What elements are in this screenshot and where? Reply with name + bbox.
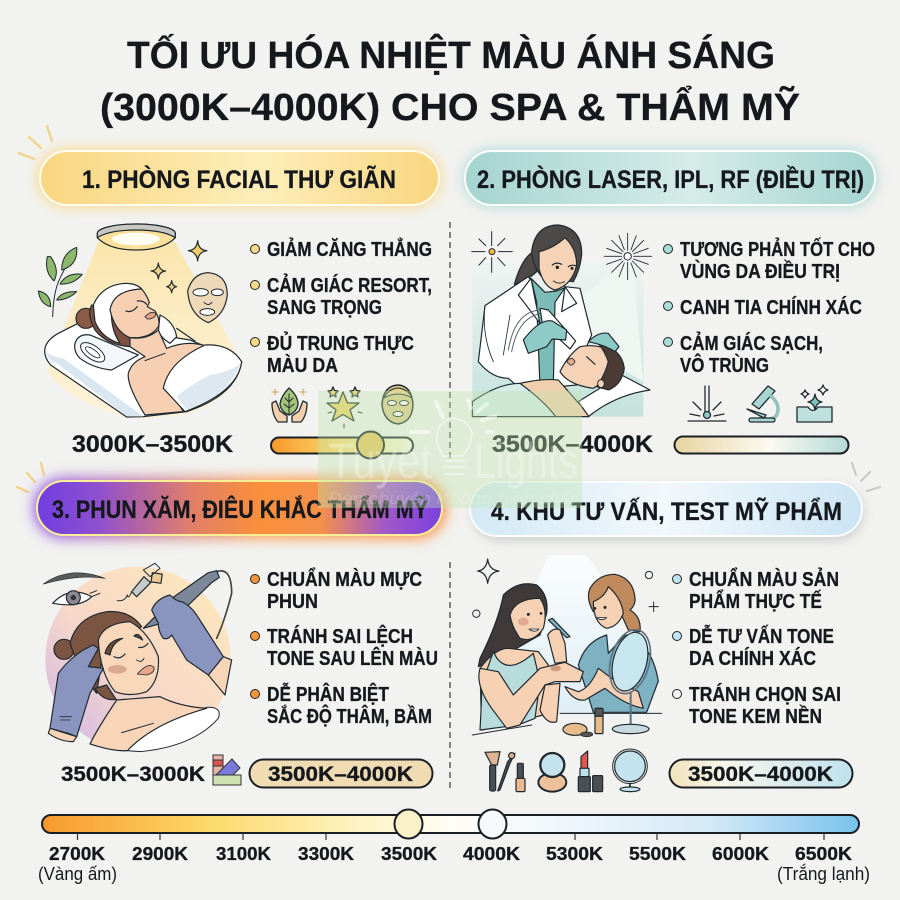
bullet list: CẢM GIÁC SẠCH, [680, 332, 823, 355]
scale labels: 2700K [49, 843, 106, 864]
slider: 3500K to 4000K [674, 436, 848, 454]
bullet list: SANG TRỌNG [267, 297, 382, 319]
icon: microscope [747, 386, 778, 422]
icon: laser beam [688, 386, 726, 421]
heading: facial room [19, 126, 440, 206]
watermark: Đèn chuyên Không gian chất [328, 489, 577, 508]
bullet list: SẮC ĐỘ THÂM, BẦM [267, 704, 432, 728]
scale labels: 6000K [712, 843, 770, 864]
icon: hands holding leaf [272, 388, 307, 422]
illustration: doctor treating patient [472, 225, 652, 417]
bullet list: CHUẨN MÀU SẢN [689, 568, 839, 591]
heading: laser room [464, 150, 876, 206]
icon: compact [538, 753, 566, 792]
bullet list [664, 237, 875, 377]
pill: 3500K to 4000K: 3500K–4000K [688, 763, 833, 786]
pill: 3500K to 4000K: 3500K–4000K [268, 763, 413, 786]
colour temperature scale [38, 810, 870, 884]
bullet list: VÙNG DA ĐIỀU TRỊ [680, 259, 840, 283]
scale labels: 2900K [132, 843, 189, 864]
range label: 3500K–3000K [61, 763, 205, 786]
icon: skin with sparkle [797, 385, 832, 422]
bullet list: PHUN [267, 591, 318, 613]
pill: 3500K to 4000K [250, 760, 432, 788]
marker: 3500K [394, 810, 422, 838]
panel: laser room [464, 150, 876, 458]
pill: 3500K to 4000K [670, 760, 852, 788]
range label: 3000K–3500K [72, 431, 234, 458]
cold label: (Trắng lạnh) [777, 863, 870, 884]
icon: stars [327, 387, 362, 428]
scale labels: 3500K [381, 843, 438, 864]
marker: 4000K [478, 810, 506, 838]
scale labels: 5300K [546, 843, 604, 864]
heading: consultation area [470, 463, 880, 541]
icon: colour swatches [213, 755, 241, 785]
illustration: eyebrow tattooing [43, 563, 232, 752]
scale labels [49, 843, 853, 864]
illustration: two women testing cosmetics [472, 555, 662, 792]
bullet list: GIẢM CĂNG THẲNG [267, 238, 432, 261]
bullet list: MÀU DA [267, 354, 338, 377]
bullet list: VÔ TRÙNG [680, 353, 769, 377]
warm label: (Vàng ấm) [38, 864, 117, 884]
bullet list [250, 238, 432, 377]
scale bar [42, 815, 859, 833]
bullet list: TONE SAU LÊN MÀU [267, 646, 438, 670]
slider: 3000K to 3500K [271, 432, 413, 458]
heading: tattoo room [17, 463, 446, 538]
heading: facial room: 1. PHÒNG FACIAL THƯ GIÃN [82, 164, 396, 194]
illustration: woman relaxing under warm lamp [38, 224, 243, 419]
bullet list: TRÁNH CHỌN SAI [689, 683, 841, 706]
title: TỐI ƯU HÓA NHIỆT MÀU ÁNH SÁNG [127, 32, 775, 77]
icon: lipstick [578, 751, 603, 792]
icon: brushes [485, 752, 525, 792]
bullet list [672, 568, 841, 728]
scale labels: 5500K [629, 843, 687, 864]
watermark [318, 391, 582, 508]
range label: 3500K–4000K [492, 431, 654, 458]
bullet list: CHUẨN MÀU MỰC [267, 568, 422, 591]
icon: face mask [382, 385, 413, 424]
bullet list: CẢM GIÁC RESORT, [267, 274, 432, 297]
title: (3000K–4000K) CHO SPA & THẨM MỸ [100, 84, 800, 129]
panel: tattoo room [17, 463, 446, 788]
bullet list: DỄ PHÂN BIỆT [267, 682, 389, 706]
scale labels: 3100K [216, 843, 272, 864]
watermark: Tuyet [328, 433, 432, 489]
bullet list: TRÁNH SAI LỆCH [267, 624, 413, 648]
bullet list: CANH TIA CHÍNH XÁC [680, 296, 862, 319]
bullet list: TONE KEM NỀN [689, 705, 822, 728]
icon: hand mirror [613, 749, 647, 792]
title [100, 32, 800, 129]
bullet list [250, 568, 438, 728]
heading: tattoo room: 3. PHUN XĂM, ĐIÊU KHẮC THẨM MỸ [52, 494, 428, 524]
panel: facial room [19, 126, 440, 458]
scale labels: 6500K [795, 843, 853, 864]
watermark: Lights [474, 433, 578, 489]
bullet list: DỄ TƯ VẤN TONE [689, 625, 834, 648]
heading: consultation area: 4. KHU TƯ VẤN, TEST MỸ PHẨM [491, 496, 842, 526]
bullet list: PHẨM THỰC TẾ [689, 590, 822, 613]
bullet list: ĐỦ TRUNG THỰC [267, 331, 414, 355]
panel: consultation area [470, 463, 880, 792]
scale labels: 4000K [463, 843, 521, 864]
scale labels: 3300K [298, 843, 355, 864]
bullet list: DA CHÍNH XÁC [689, 647, 816, 670]
